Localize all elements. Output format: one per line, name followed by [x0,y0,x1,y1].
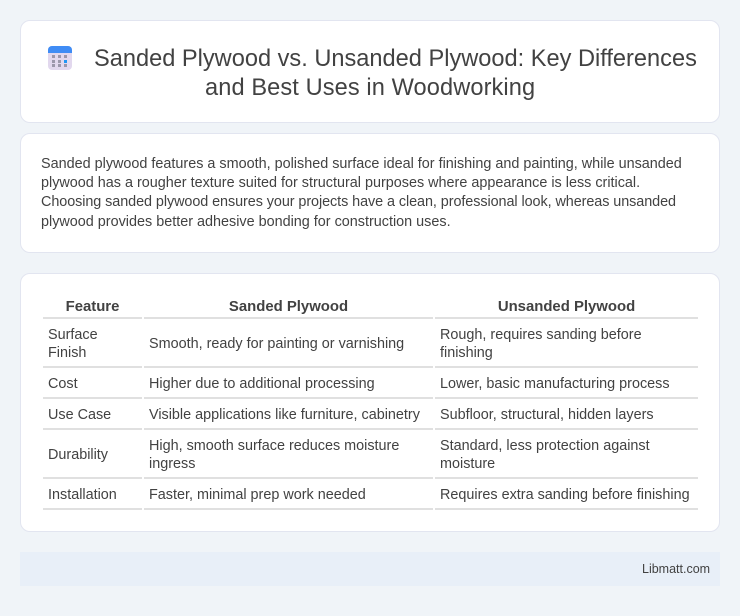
comparison table: Subfloor, structural, hidden layers [440,407,654,423]
table panel [20,273,720,532]
comparison table: Unsanded Plywood [498,299,635,315]
row: surface finish: Surface [48,327,98,343]
comparison table: finishing [440,345,493,361]
row: surface finish [48,327,98,361]
intro text: plywood has a rougher texture suited for structural purposes where appearance is less critical. [41,175,640,191]
comparison table: Smooth, ready for painting or varnishing [149,336,404,352]
table header: Feature [66,299,119,315]
row: use case: Use Case [48,407,111,423]
comparison table: Standard, less protection against [440,438,650,454]
comparison table: ingress [149,456,195,472]
title: Sanded Plywood vs. Unsanded Plywood: Key Differences [94,46,697,72]
intro text [41,156,682,230]
row: cost: Cost [48,376,78,392]
header panel [20,20,720,123]
comparison table: Sanded Plywood [229,299,348,315]
title: and Best Uses in Woodworking [205,75,535,101]
comparison table: Visible applications like furniture, cabinetry [149,407,420,423]
row: installation: Installation [48,487,117,503]
icon: calendar [48,46,72,70]
comparison table: High, smooth surface reduces moisture [149,438,399,454]
title [94,46,697,101]
intro panel [20,133,720,253]
comparison table: Higher due to additional processing [149,376,375,392]
row: surface finish: Finish [48,345,86,361]
comparison table: moisture [440,456,495,472]
intro text: plywood provides better adhesive bonding for construction uses. [41,214,451,230]
comparison table: Requires extra sanding before finishing [440,487,690,503]
comparison table: Faster, minimal prep work needed [149,487,366,503]
footer text: Libmatt.com [642,562,710,576]
intro text: Choosing sanded plywood ensures your projects have a clean, professional look, whereas unsanded [41,194,676,210]
footer bar [20,552,720,586]
comparison table [43,299,698,510]
comparison table: Lower, basic manufacturing process [440,376,670,392]
row: durability: Durability [48,447,108,463]
intro text: Sanded plywood features a smooth, polished surface ideal for finishing and painting, while unsanded [41,156,682,172]
comparison table: Rough, requires sanding before [440,327,642,343]
